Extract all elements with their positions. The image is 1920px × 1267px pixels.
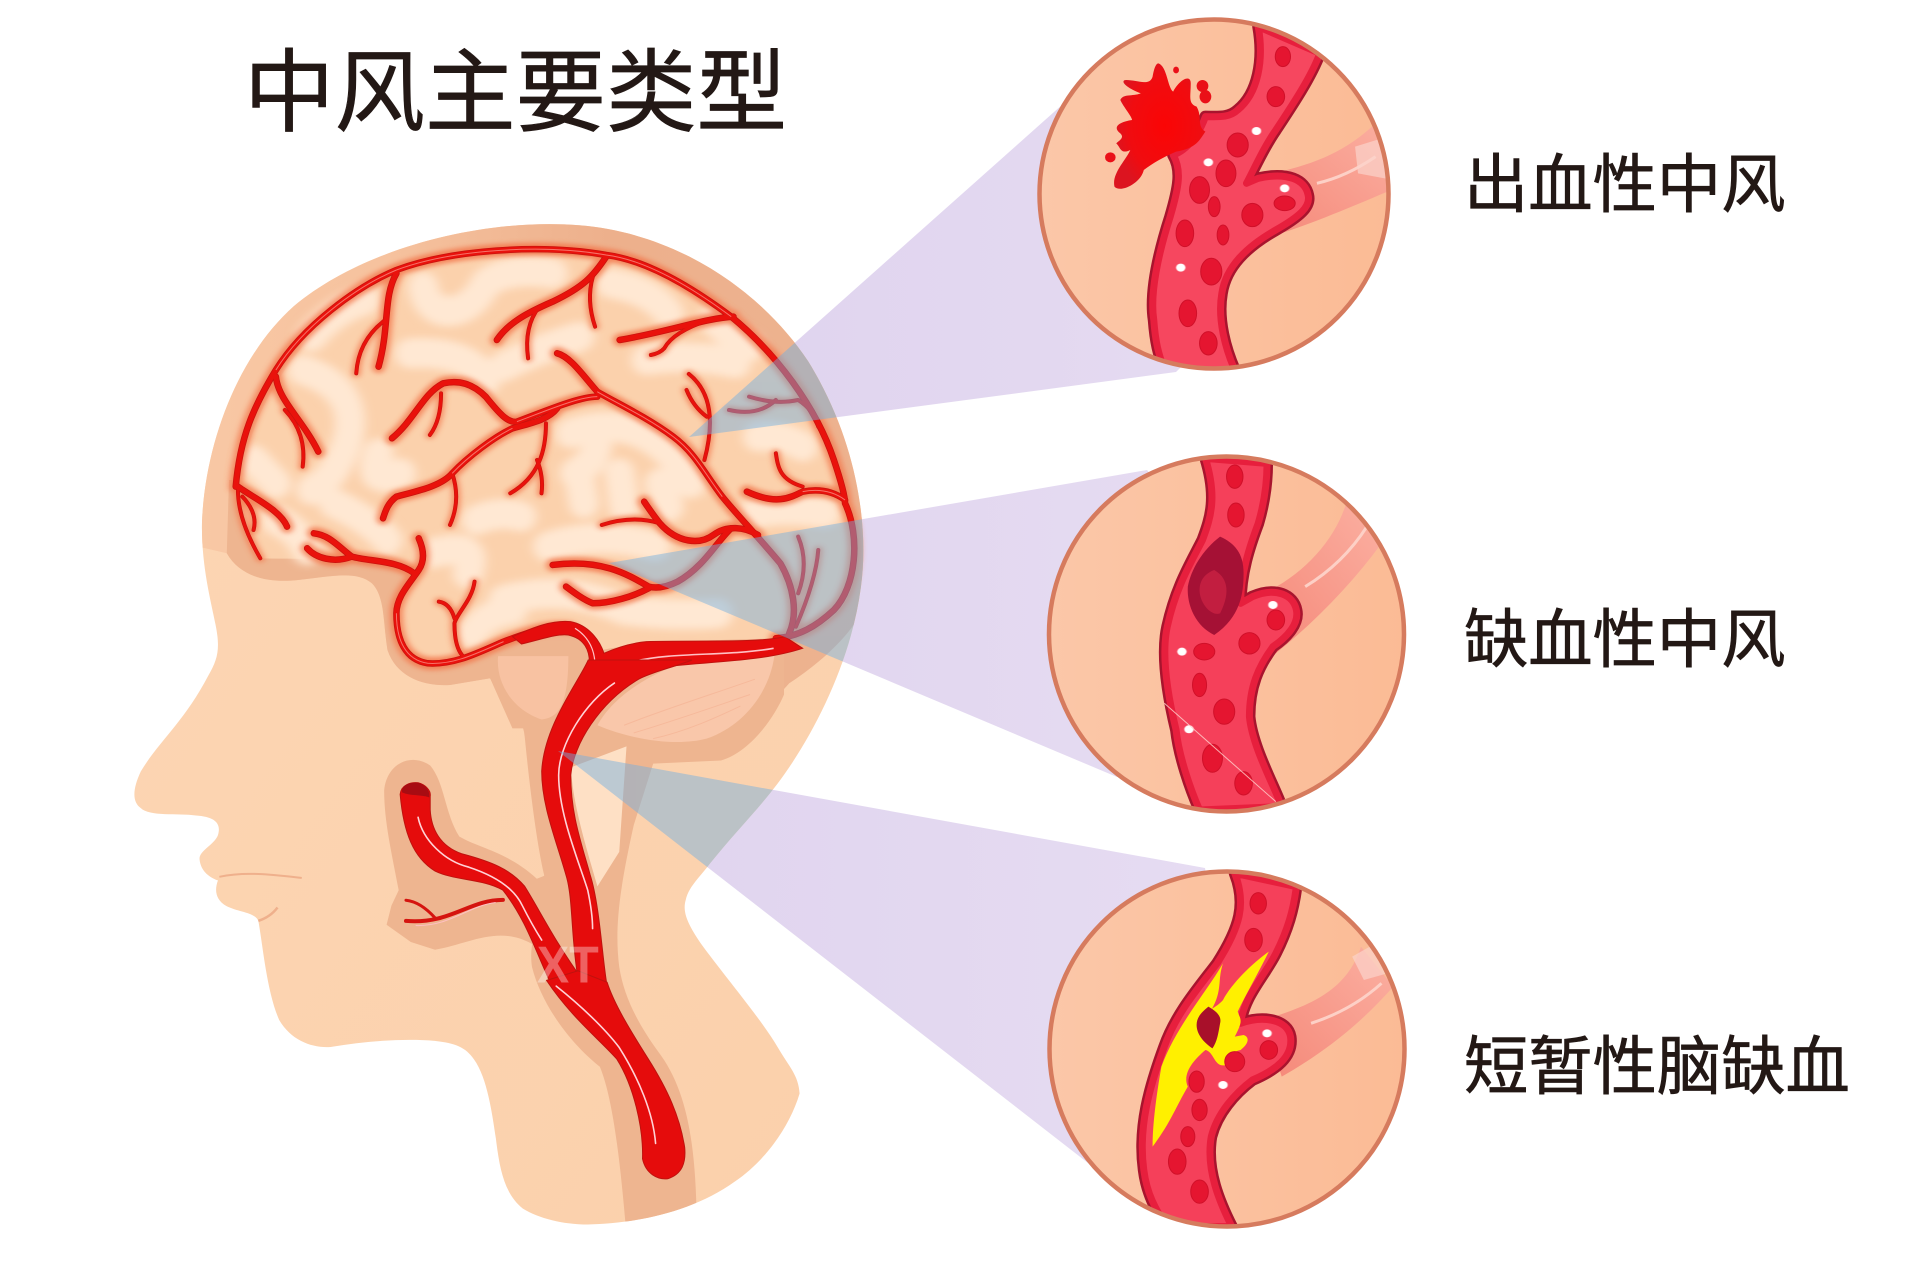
carotid highlights [418, 683, 656, 1143]
watermark: XT [537, 936, 599, 994]
circle border [1050, 872, 1404, 1226]
facial lines [219, 874, 302, 878]
highlights [1218, 1029, 1272, 1089]
label: ischemic stroke: 缺血性中风 [1464, 604, 1786, 676]
highlights [1177, 601, 1278, 733]
arteries dark edge [236, 249, 854, 663]
thrombus [1188, 537, 1244, 635]
blocked vessel [1165, 458, 1297, 810]
panel: transient ischemic attack circle [1050, 872, 1404, 1227]
label: transient ischemic attack: 短暂性脑缺血 [1464, 1031, 1850, 1103]
vessel glow [236, 249, 854, 663]
brain folds [254, 271, 825, 633]
circle background [1050, 872, 1404, 1226]
arteries bright core [236, 249, 854, 663]
highlights [1176, 127, 1289, 272]
skull and neck bands [202, 224, 864, 1222]
artery highlights [276, 249, 845, 663]
side branch [1276, 506, 1378, 653]
label: hemorrhagic stroke: 出血性中风 [1464, 149, 1786, 221]
external carotid [400, 783, 583, 990]
plaque [1153, 952, 1269, 1147]
narrowed vessel [1142, 873, 1296, 1227]
cerebellum folds [624, 679, 755, 739]
blood splash [1114, 63, 1205, 189]
main trunk [512, 621, 803, 723]
internal carotid [542, 660, 692, 986]
cerebellum [597, 656, 774, 742]
circle border [1049, 456, 1404, 812]
cone overlap tint on head [558, 342, 864, 867]
carotid arteries [400, 660, 692, 1179]
head shape [134, 224, 863, 1225]
head silhouette with brain and arteries [134, 203, 914, 1236]
circle border [1040, 20, 1388, 368]
projection cone: transient ischemic attack [558, 751, 1227, 1210]
title: 中风主要类型 [244, 43, 787, 144]
red blood cells [1193, 465, 1285, 795]
ruptured vessel [1153, 27, 1320, 370]
clot [1197, 1007, 1220, 1048]
red blood cells [1176, 47, 1295, 355]
brain and surface arteries [236, 249, 854, 723]
common carotid [547, 971, 685, 1179]
panel: ischemic stroke circle [1049, 456, 1404, 812]
circle background [1050, 457, 1404, 811]
brain stem [498, 656, 568, 719]
brain hemisphere [238, 254, 853, 662]
projection cone: ischemic stroke [609, 470, 1226, 777]
carotid top cap [402, 783, 429, 797]
trunk highlight [584, 648, 774, 717]
side branch [1284, 126, 1386, 232]
projection cone: hemorrhagic stroke [689, 60, 1300, 437]
panel: hemorrhagic stroke circle [1040, 20, 1399, 370]
circle background [1040, 20, 1388, 368]
red blood cells [1168, 893, 1278, 1203]
external branch twigs [406, 900, 503, 921]
side branch [1278, 947, 1392, 1076]
